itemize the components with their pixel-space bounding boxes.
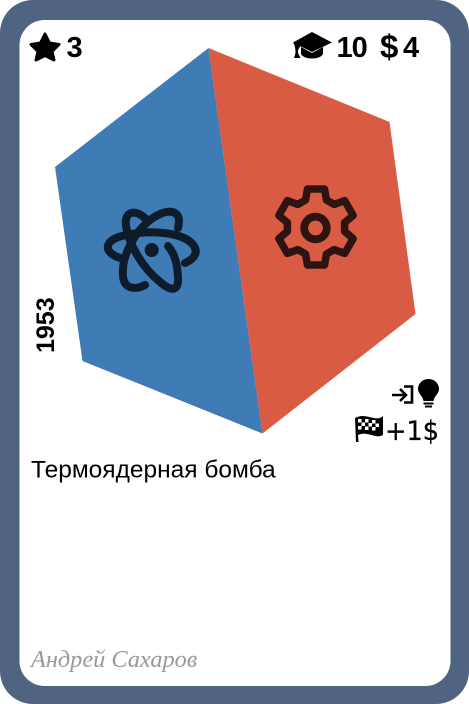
icon: checkered flag xyxy=(355,416,383,442)
year: 1953 xyxy=(32,297,60,353)
hexagon: red engineering half xyxy=(208,48,416,434)
icon: light bulb xyxy=(418,379,439,408)
icon: dollar: $ xyxy=(380,28,398,65)
author name: Андрей Сахаров xyxy=(29,646,198,673)
icon: graduation cap xyxy=(293,32,332,58)
icon: atom xyxy=(108,212,196,289)
icon: gear xyxy=(279,189,353,265)
card title: Термоядерная бомба xyxy=(31,456,276,484)
star count: 3 xyxy=(66,32,83,64)
money cost: 4 xyxy=(403,32,419,64)
icon: star xyxy=(31,34,59,60)
education cost: 10 xyxy=(336,32,367,64)
hexagon: blue science half xyxy=(55,48,262,434)
icon: arrow into bracket xyxy=(392,386,412,402)
bonus text: +1$ xyxy=(385,416,439,447)
